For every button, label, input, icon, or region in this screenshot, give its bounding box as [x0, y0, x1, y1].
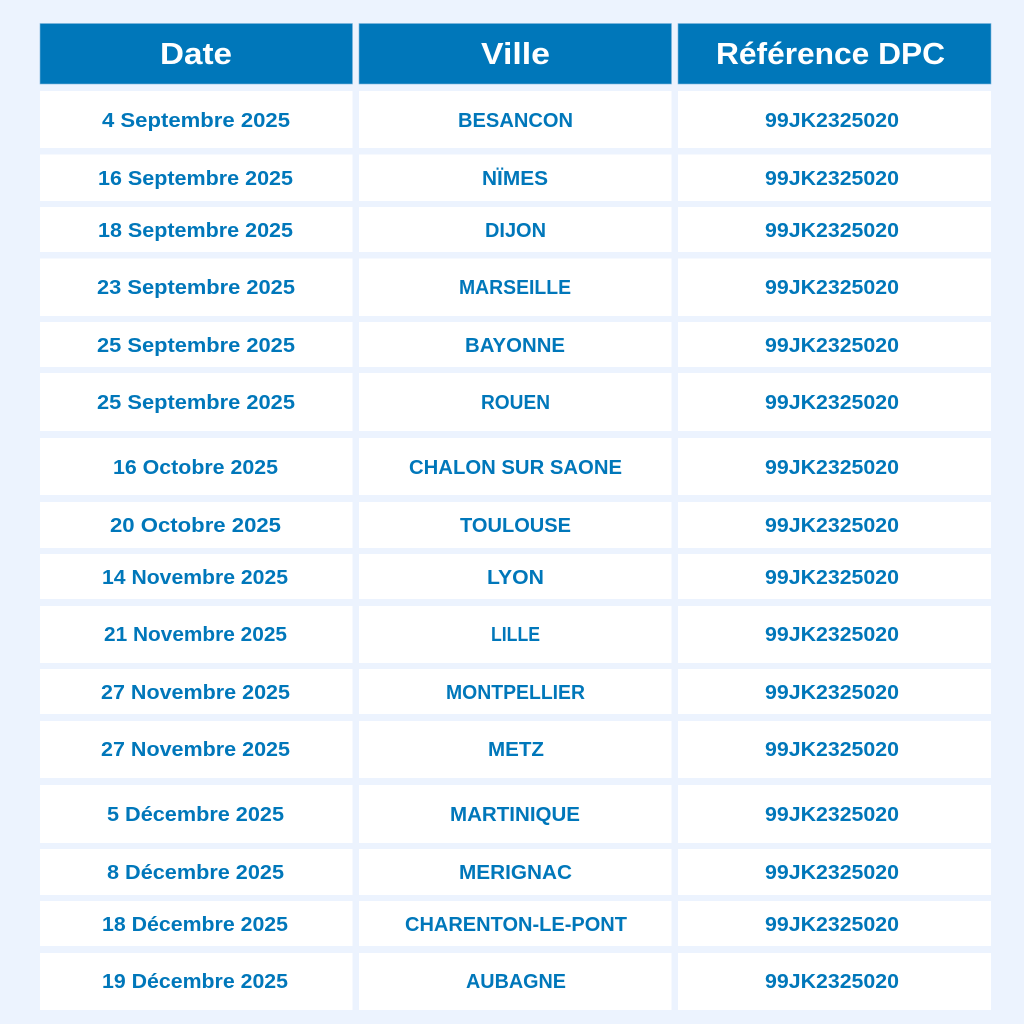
row 2: 99JK2325020 [765, 167, 899, 190]
row 10: LILLE [491, 623, 540, 646]
row 6: 99JK2325020 [765, 391, 899, 414]
header: Référence DPC: Référence DPC [716, 36, 945, 71]
row 1: BESANCON [458, 109, 573, 132]
row 5 [40, 322, 991, 367]
row 11: 27 Novembre 2025 [101, 681, 290, 704]
row 2 [40, 154, 991, 201]
row 5: BAYONNE [465, 334, 565, 357]
row 7: 99JK2325020 [765, 456, 899, 479]
row 13: MARTINIQUE [450, 803, 580, 826]
row 15: CHARENTON-LE-PONT [405, 913, 627, 936]
row 4 [40, 258, 991, 316]
row 14: 8 Décembre 2025 [107, 861, 284, 884]
row 12: 99JK2325020 [765, 738, 899, 761]
row 15 [40, 901, 991, 946]
row 5: 25 Septembre 2025 [97, 334, 295, 357]
row 4: 23 Septembre 2025 [97, 276, 295, 299]
row 14 [40, 849, 991, 895]
row 6: ROUEN [481, 391, 550, 414]
row 13: 99JK2325020 [765, 803, 899, 826]
row 14: 99JK2325020 [765, 861, 899, 884]
row 14: MERIGNAC [459, 861, 572, 884]
row 4: 99JK2325020 [765, 276, 899, 299]
row 12: METZ [488, 738, 544, 761]
row 1: 99JK2325020 [765, 109, 899, 132]
row 3 [40, 207, 991, 252]
row 6 [40, 373, 991, 431]
row 9: LYON [487, 566, 544, 589]
row 10 [40, 606, 991, 663]
header: Référence DPC [678, 24, 991, 84]
row 13 [40, 785, 991, 843]
row 3: 18 Septembre 2025 [98, 219, 293, 242]
row 4: MARSEILLE [459, 276, 571, 299]
header: Ville: Ville [481, 36, 550, 71]
row 7: CHALON SUR SAONE [409, 456, 622, 479]
row 9: 14 Novembre 2025 [102, 566, 288, 589]
row 12 [40, 721, 991, 778]
row 3: DIJON [485, 219, 546, 242]
row 1 [40, 91, 991, 148]
row 8: 99JK2325020 [765, 514, 899, 537]
row 8: 20 Octobre 2025 [110, 514, 281, 537]
row 5: 99JK2325020 [765, 334, 899, 357]
row 16: 19 Décembre 2025 [102, 970, 288, 993]
row 2: 16 Septembre 2025 [98, 167, 293, 190]
row 9 [40, 554, 991, 599]
row 6: 25 Septembre 2025 [97, 391, 295, 414]
row 3: 99JK2325020 [765, 219, 899, 242]
row 1: 4 Septembre 2025 [102, 109, 290, 132]
row 11: MONTPELLIER [446, 681, 585, 704]
row 7: 16 Octobre 2025 [113, 456, 278, 479]
header: Ville [359, 24, 672, 84]
row 9: 99JK2325020 [765, 566, 899, 589]
row 16: 99JK2325020 [765, 970, 899, 993]
row 10: 99JK2325020 [765, 623, 899, 646]
row 7 [40, 438, 991, 495]
row 12: 27 Novembre 2025 [101, 738, 290, 761]
row 15: 99JK2325020 [765, 913, 899, 936]
header: Date [40, 24, 352, 84]
header row [40, 24, 991, 84]
row 8: TOULOUSE [460, 514, 571, 537]
row 13: 5 Décembre 2025 [107, 803, 284, 826]
header: Date: Date [160, 36, 232, 71]
row 11 [40, 669, 991, 714]
row 16 [40, 953, 991, 1010]
row 15: 18 Décembre 2025 [102, 913, 288, 936]
row 8 [40, 502, 991, 548]
row 2: NÏMES [482, 167, 548, 190]
row 11: 99JK2325020 [765, 681, 899, 704]
row 10: 21 Novembre 2025 [104, 623, 287, 646]
row 16: AUBAGNE [466, 970, 566, 993]
